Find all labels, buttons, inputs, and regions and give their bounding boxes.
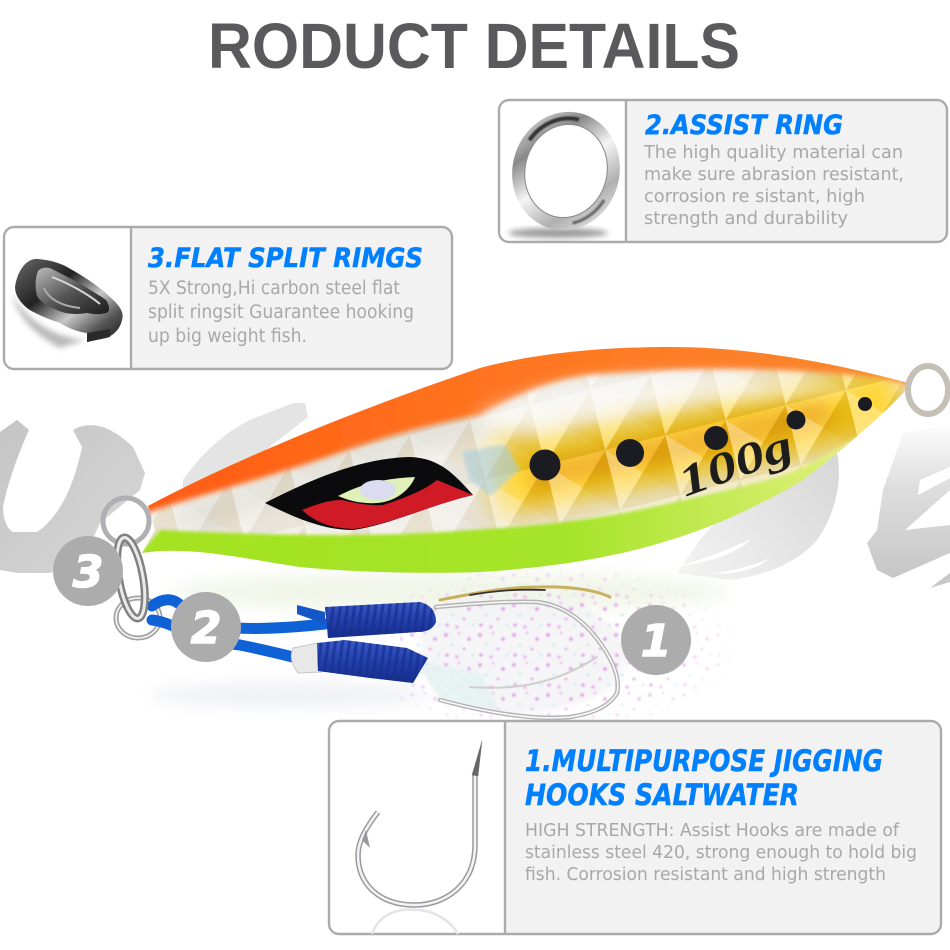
callout badge 2: 2	[191, 603, 221, 654]
icon: assist ring	[508, 108, 624, 238]
nose eyelet	[908, 366, 948, 414]
description: stainless steel 420, strong enough to hold big	[525, 842, 917, 863]
split ring	[112, 536, 150, 620]
eye	[265, 457, 473, 530]
description	[525, 820, 917, 885]
blue braided cord	[152, 600, 325, 660]
callout badge 1	[621, 605, 691, 675]
heading: 2.ASSIST RING	[645, 110, 843, 141]
lower thread wrap	[317, 640, 428, 683]
description	[148, 278, 414, 347]
description: split ringsit Guarantee hooking	[148, 302, 414, 323]
facets	[148, 368, 906, 544]
assist ring	[116, 598, 160, 638]
callout badge 3	[53, 536, 123, 606]
description: up big weight fish.	[148, 326, 307, 347]
heading: 1.MULTIPURPOSE JIGGING	[525, 744, 883, 778]
heading: HOOKS SALTWATER	[525, 778, 799, 812]
hook shadow	[150, 683, 430, 707]
upper cord knot	[297, 605, 325, 624]
panel: flat split rings	[4, 227, 452, 369]
assist hooks feather sparkles	[400, 572, 730, 719]
description: The high quality material can	[643, 142, 903, 163]
soft shadow under lure	[170, 572, 730, 612]
green belly	[142, 434, 858, 573]
description: HIGH STRENGTH: Assist Hooks are made of	[525, 820, 900, 841]
upper thread wrap	[325, 602, 436, 638]
hologram patch	[462, 444, 520, 496]
title: RODUCT DETAILS	[208, 10, 740, 82]
tail eyelet	[103, 498, 149, 544]
panel: assist ring	[499, 100, 947, 242]
yellow flank	[495, 396, 900, 480]
silver sheen	[180, 425, 480, 520]
description: corrosion re sistant, high	[644, 186, 865, 207]
callout badge 1: 1	[641, 616, 671, 667]
heading	[525, 744, 883, 812]
background brush strokes	[0, 380, 950, 588]
lure body	[142, 347, 912, 573]
side spots	[530, 397, 872, 480]
icon: flat split ring	[12, 259, 123, 348]
heading: 3.FLAT SPLIT RIMGS	[148, 243, 423, 274]
panel: jigging hooks	[329, 721, 941, 934]
callout badge 3: 3	[73, 547, 103, 598]
description	[643, 142, 904, 229]
weight label: 100g	[672, 420, 799, 506]
orange back	[148, 347, 912, 516]
description: make sure abrasion resistant,	[644, 164, 904, 185]
description: 5X Strong,Hi carbon steel flat	[148, 278, 400, 299]
callout badge 2	[171, 592, 241, 662]
metal ferrule	[291, 643, 322, 673]
description: fish. Corrosion resistant and high strength	[525, 864, 886, 885]
icon: hook	[358, 741, 482, 934]
description: strength and durability	[644, 208, 848, 229]
hooks	[436, 587, 618, 718]
